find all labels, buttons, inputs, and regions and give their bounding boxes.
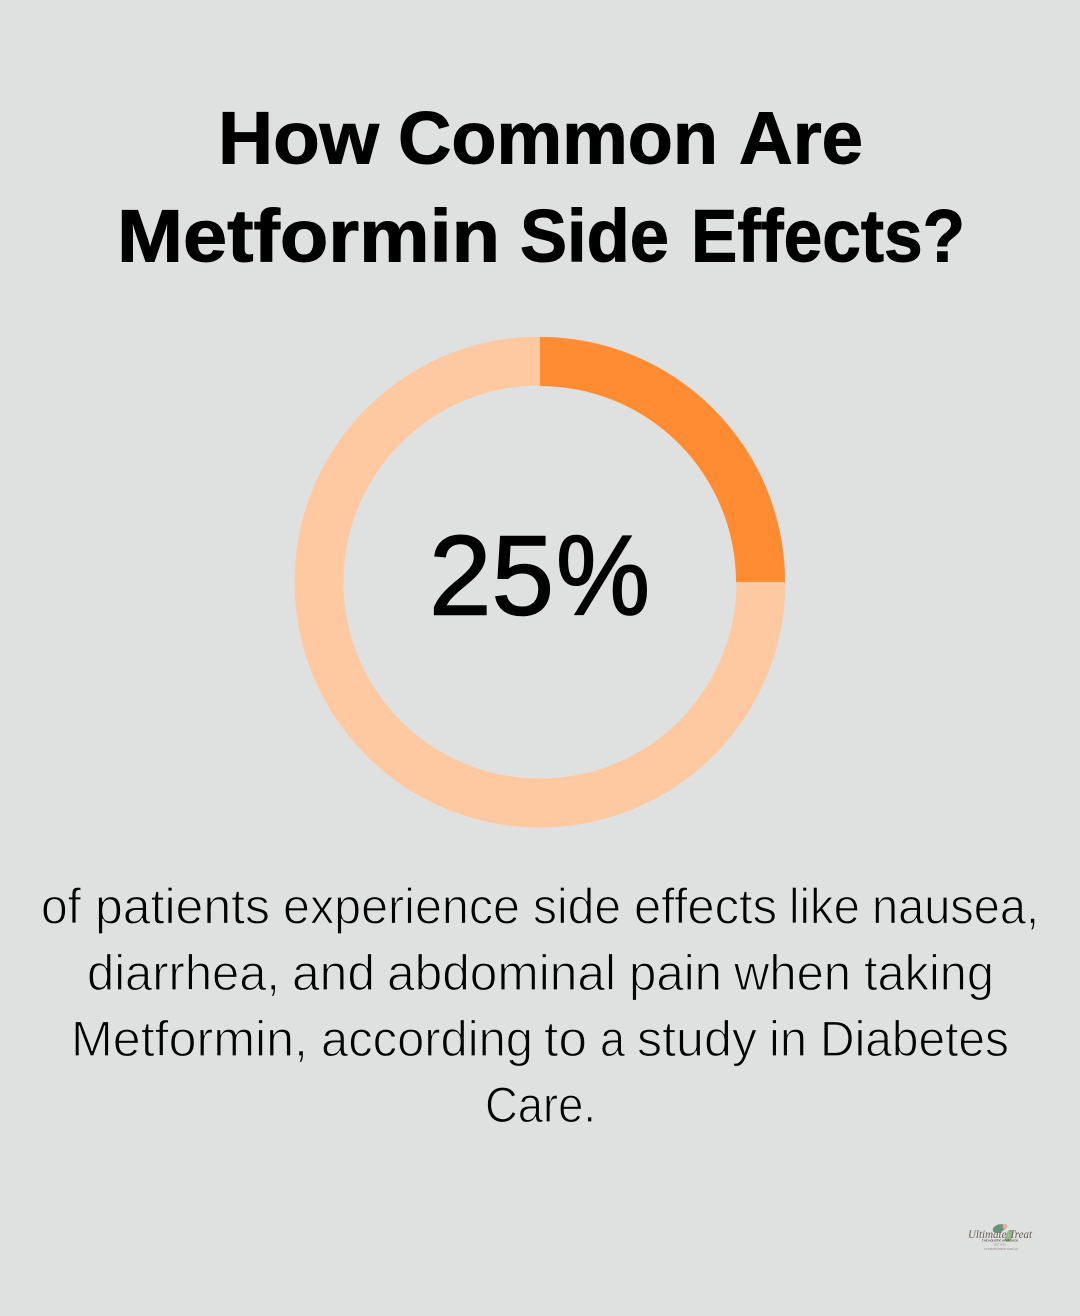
title [117,97,965,278]
description text: Care. [485,1077,596,1133]
description text: diarrhea, [87,945,280,1001]
description text: pain [629,945,722,1001]
description text: in [769,1011,807,1067]
description text: taking [864,945,994,1001]
logo: Ultimate Treat [968,1223,1033,1251]
description text [41,878,1039,1133]
description text: of [41,878,81,934]
description text: when [733,945,851,1001]
description text: a [600,1011,625,1067]
title: Common [398,97,718,180]
logo wordmark: Ultimate Treat [968,1227,1033,1241]
description text: and [292,945,375,1001]
title: Are [739,97,863,180]
logo website: ULTIMATETREAT.COM.AU [984,1247,1018,1251]
description text: side [533,878,621,934]
description text: Metformin, [71,1011,308,1067]
logo tagline: THE HOLISTIC APPROACH [982,1238,1018,1242]
title: Effects? [691,195,965,278]
donut segment: 25% [540,337,785,582]
title: How [218,97,379,180]
description text: effects [634,878,777,934]
title: Side [520,195,669,278]
description text: Diabetes [820,1011,1009,1067]
description text: abdominal [387,945,616,1001]
description text: according [321,1011,533,1067]
donut value [429,512,650,638]
icon: logo leaves [992,1223,1015,1243]
donut value: % [556,512,650,638]
description text: nausea, [872,878,1039,934]
description text: experience [283,878,520,934]
donut track: remaining 75% [319,361,761,803]
donut value: 25 [429,512,554,638]
donut chart: 25% [319,337,785,803]
title: Metformin [117,195,500,278]
logo established line: EST. 2014 [994,1244,1006,1246]
description text: to [544,1011,587,1067]
description text: patients [95,878,270,934]
description text: study [637,1011,757,1067]
description text: like [789,878,860,934]
